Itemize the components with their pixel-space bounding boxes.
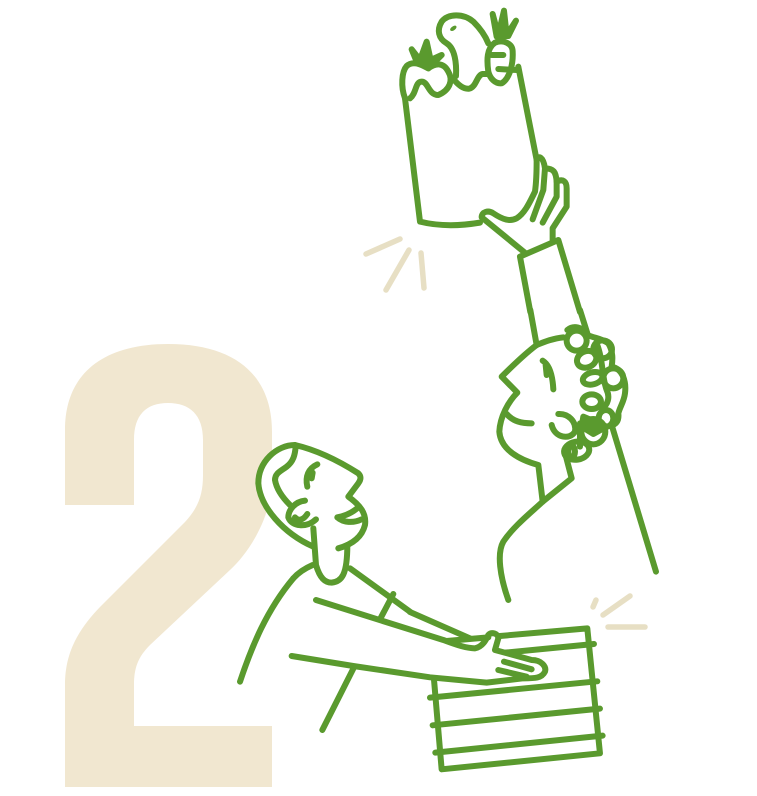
left torso — [293, 565, 313, 578]
grocery bag with hand — [402, 11, 580, 312]
apple leaves — [412, 42, 442, 68]
man arms and crate — [240, 578, 603, 769]
fingers — [447, 637, 532, 677]
woman — [499, 310, 656, 600]
apple — [402, 63, 451, 98]
carrot leaves — [493, 11, 516, 37]
face and neck — [499, 337, 563, 502]
curls — [563, 327, 625, 462]
sparkle rays top — [366, 239, 424, 290]
torso left — [240, 578, 293, 682]
raised arm — [520, 240, 580, 312]
torso lower — [322, 667, 354, 730]
ear — [288, 501, 316, 525]
right shoulder — [350, 568, 410, 612]
hand — [482, 157, 567, 253]
sleeve cuff near — [380, 594, 393, 619]
bag rim wave — [453, 74, 488, 89]
sleeve cuff far — [319, 612, 343, 659]
raised arm back — [530, 310, 587, 345]
big numeral 2 — [65, 344, 272, 787]
carrot — [487, 41, 517, 83]
squash seed — [449, 25, 457, 32]
eye — [307, 464, 317, 487]
face — [295, 445, 365, 548]
bag outline — [405, 67, 537, 225]
eye — [543, 361, 553, 389]
sparkle rays crate — [593, 596, 645, 627]
finger lines — [533, 168, 557, 223]
crate — [430, 628, 603, 769]
hand on crate — [292, 600, 545, 683]
ear — [552, 414, 575, 437]
man — [258, 445, 410, 612]
head fill — [258, 445, 365, 583]
back line — [612, 425, 656, 572]
mouth — [507, 414, 532, 423]
hair inner — [275, 447, 296, 505]
neck back and shoulder — [500, 457, 572, 600]
squash — [439, 15, 488, 76]
mouth — [337, 507, 362, 522]
shoulder to wrist — [410, 612, 470, 638]
hair outer — [258, 445, 313, 547]
neck — [313, 528, 347, 583]
